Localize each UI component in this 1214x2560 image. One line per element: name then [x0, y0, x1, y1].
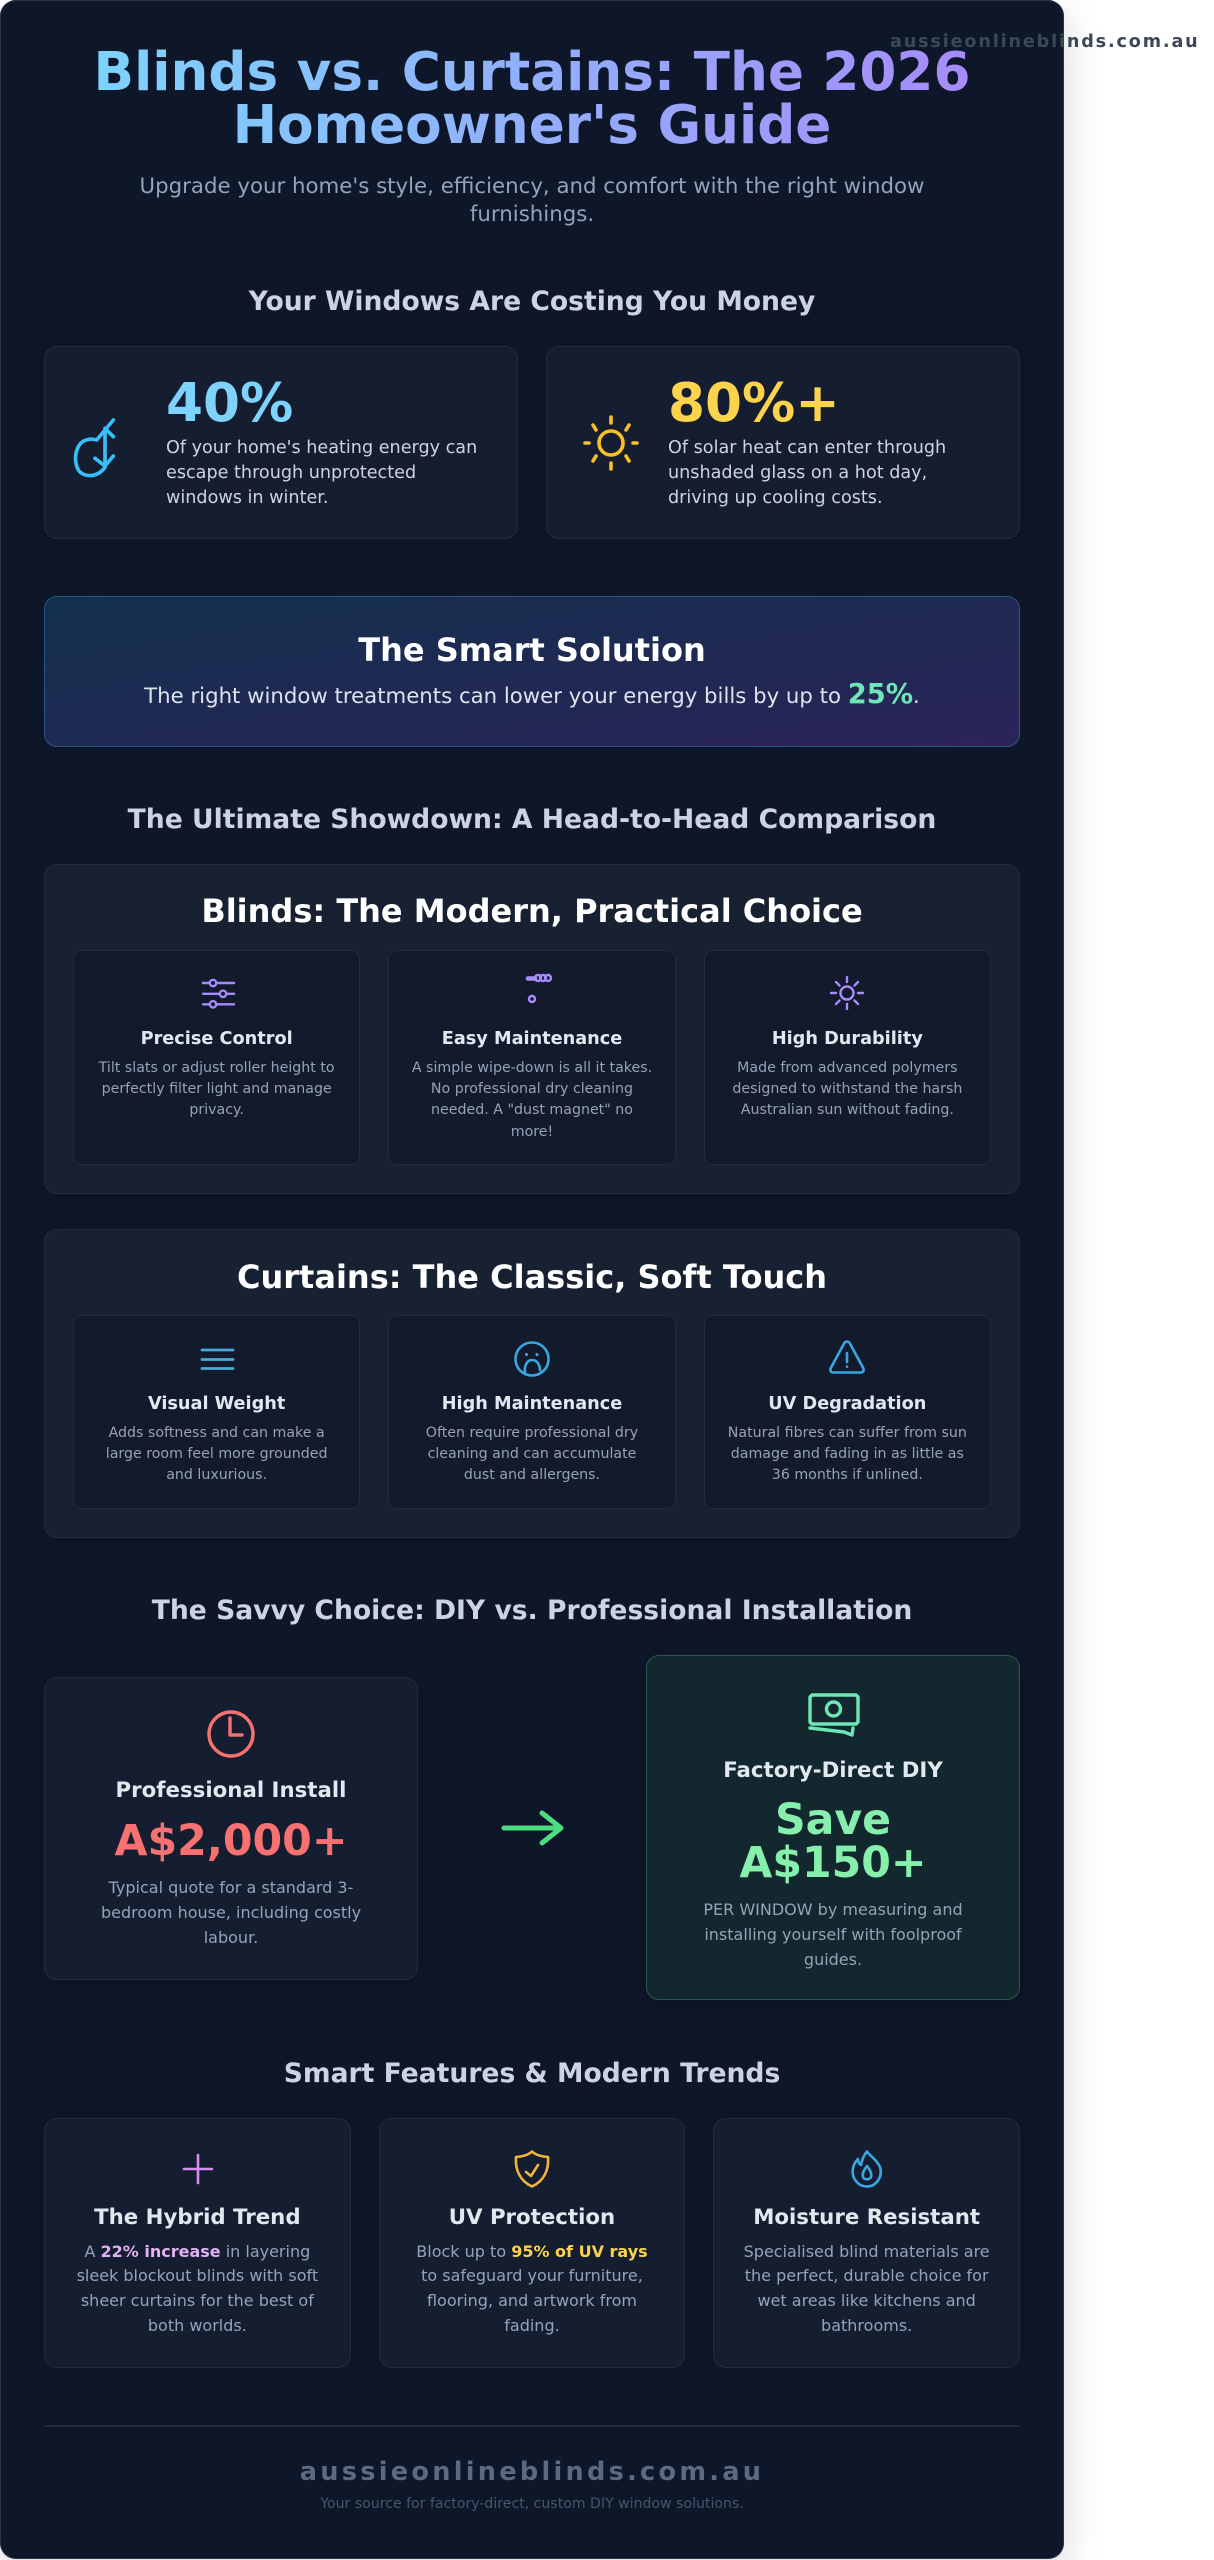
description: PER WINDOW by measuring and: [703, 1900, 963, 1919]
savings: Save: [775, 1795, 891, 1845]
card text: [732, 1060, 962, 1118]
subtitle: furnishings.: [470, 202, 594, 227]
subtitle: Upgrade your home's style, efficiency, and comfort with the right window: [140, 174, 924, 198]
panel: curtains: [44, 1229, 1020, 1538]
stat description: driving up cooling costs.: [668, 488, 883, 508]
title: [90, 46, 974, 152]
description: [101, 1878, 361, 1947]
card text: [98, 1060, 335, 1118]
stat description: unshaded glass on a hot day,: [668, 463, 927, 483]
price: A$2,000+: [114, 1816, 348, 1866]
card text: [412, 1060, 652, 1140]
card text: A simple wipe-down is all it takes.: [412, 1060, 652, 1076]
heading: The Hybrid Trend: [94, 2204, 301, 2230]
icon: flame: [851, 2150, 882, 2188]
description: installing yourself with foolproof: [704, 1925, 962, 1944]
watermark: aussieonlineblinds.com.au: [890, 32, 1200, 52]
description: sleek blockout blinds with soft: [77, 2266, 318, 2285]
card text: more!: [511, 1124, 553, 1140]
arrow: [502, 1810, 564, 1846]
description: flooring, and artwork from: [427, 2291, 637, 2310]
heading: UV Protection: [449, 2204, 615, 2230]
icon: sliders: [202, 978, 236, 1009]
stat description: escape through unprotected: [166, 463, 416, 483]
card heading: Visual Weight: [148, 1394, 285, 1414]
stat description: Of your home's heating energy can: [166, 438, 477, 458]
panel: blinds: [44, 864, 1020, 1194]
description: Block up to 95% of UV rays: [416, 2242, 648, 2260]
callout text: The right window treatments can lower your energy bills by up to 25%.: [144, 679, 920, 710]
savings: [739, 1795, 927, 1888]
card text: large room feel more grounded: [106, 1446, 328, 1462]
description: wet areas like kitchens and: [757, 2291, 976, 2310]
card text: [728, 1424, 967, 1483]
description: both worlds.: [148, 2316, 247, 2335]
card text: cleaning and can accumulate: [428, 1446, 636, 1462]
icon: sun: [583, 415, 639, 471]
panel: professional install: [44, 1677, 418, 1980]
callout: smart solution: [44, 596, 1020, 747]
heading: your windows: Your Windows Are Costing You Money: [249, 286, 815, 317]
description: Specialised blind materials are: [744, 2242, 990, 2260]
description: sheer curtains for the best of: [81, 2291, 314, 2310]
footer brand: aussieonlineblinds.com.au: [300, 2457, 764, 2487]
icon: money: [808, 1693, 860, 1737]
card text: Made from advanced polymers: [737, 1060, 958, 1076]
card text: dust and allergens.: [464, 1467, 600, 1483]
description: fading.: [504, 2316, 560, 2335]
icon: sun outline: [830, 976, 864, 1010]
card heading: Easy Maintenance: [442, 1029, 622, 1049]
card text: damage and fading in as little as: [731, 1446, 964, 1462]
card: high durability: [704, 950, 991, 1164]
panel: factory-direct diy: [646, 1655, 1020, 2000]
savings: A$150+: [739, 1838, 927, 1888]
icon: shield: [514, 2150, 550, 2188]
description: [77, 2242, 318, 2335]
card text: Adds softness and can make a: [109, 1424, 325, 1440]
description: [703, 1900, 963, 1969]
card: visual weight: [73, 1314, 360, 1508]
stat: 40%: 40%: [166, 372, 293, 434]
icon: sad face: [514, 1341, 550, 1377]
panel: 40% stat: [44, 346, 518, 539]
description: the perfect, durable choice for: [745, 2266, 989, 2285]
stat description: [668, 438, 946, 508]
description: labour.: [204, 1928, 258, 1947]
blinds heading: Blinds: The Modern, Practical Choice: [201, 892, 863, 930]
card text: designed to withstand the harsh: [732, 1081, 962, 1097]
card: high maintenance: [388, 1314, 676, 1508]
card heading: High Durability: [772, 1029, 923, 1049]
icon: lines: [200, 1348, 234, 1370]
card: easy maintenance: [388, 950, 676, 1164]
card text: Often require professional dry: [426, 1424, 638, 1440]
description: [416, 2242, 648, 2335]
title: Homeowner's Guide: [233, 94, 831, 156]
icon: clock: [207, 1710, 255, 1758]
subtitle: [140, 174, 924, 227]
icon: plus: [182, 2154, 214, 2184]
card: precise control: [73, 950, 360, 1164]
heading: Moisture Resistant: [753, 2204, 980, 2230]
icon: heat escaping: [74, 418, 116, 478]
icon: warning triangle: [829, 1340, 865, 1374]
card: uv degradation: [704, 1314, 991, 1508]
description: bedroom house, including costly: [101, 1903, 361, 1922]
card heading: High Maintenance: [442, 1394, 622, 1414]
heading: showdown: The Ultimate Showdown: A Head-to-Head Comparison: [128, 804, 936, 835]
heading: Professional Install: [116, 1778, 346, 1803]
title: Blinds vs. Curtains: The 2026: [94, 40, 970, 102]
description: Typical quote for a standard 3-: [109, 1878, 353, 1897]
description: guides.: [804, 1950, 862, 1969]
curtains heading: Curtains: The Classic, Soft Touch: [237, 1258, 827, 1296]
stat description: [166, 438, 477, 508]
heading: Factory-Direct DIY: [723, 1758, 943, 1782]
card text: privacy.: [189, 1102, 244, 1118]
card text: 36 months if unlined.: [772, 1467, 923, 1483]
heading: smart features: Smart Features & Modern Trends: [284, 2058, 780, 2089]
callout heading: The Smart Solution: [358, 631, 706, 669]
card text: Natural fibres can suffer from sun: [728, 1424, 967, 1440]
stat description: windows in winter.: [166, 488, 329, 508]
card text: [426, 1424, 638, 1483]
card heading: Precise Control: [141, 1029, 293, 1049]
heading: savvy choice: The Savvy Choice: DIY vs. Professional Installation: [152, 1595, 912, 1626]
card text: needed. A "dust magnet" no: [431, 1102, 633, 1118]
panel: hybrid trend: [44, 2118, 351, 2368]
panel: 80% stat: [546, 346, 1020, 539]
stat: 80%+: 80%+: [668, 372, 840, 434]
card text: [106, 1424, 328, 1483]
card text: Australian sun without fading.: [741, 1102, 954, 1118]
description: bathrooms.: [821, 2316, 912, 2335]
card heading: UV Degradation: [768, 1394, 926, 1414]
stat description: Of solar heat can enter through: [668, 438, 946, 458]
card text: perfectly filter light and manage: [102, 1081, 332, 1097]
card text: and luxurious.: [166, 1467, 267, 1483]
description: to safeguard your furniture,: [421, 2266, 643, 2285]
panel: moisture resistant: [713, 2118, 1020, 2368]
footer tagline: Your source for factory-direct, custom DIY window solutions.: [320, 2496, 744, 2512]
panel: uv protection: [379, 2118, 685, 2368]
icon: wipe drops: [526, 974, 552, 1004]
card text: No professional dry cleaning: [431, 1081, 633, 1097]
description: A 22% increase in layering: [84, 2242, 310, 2260]
description: [744, 2242, 990, 2335]
card text: Tilt slats or adjust roller height to: [99, 1060, 335, 1076]
